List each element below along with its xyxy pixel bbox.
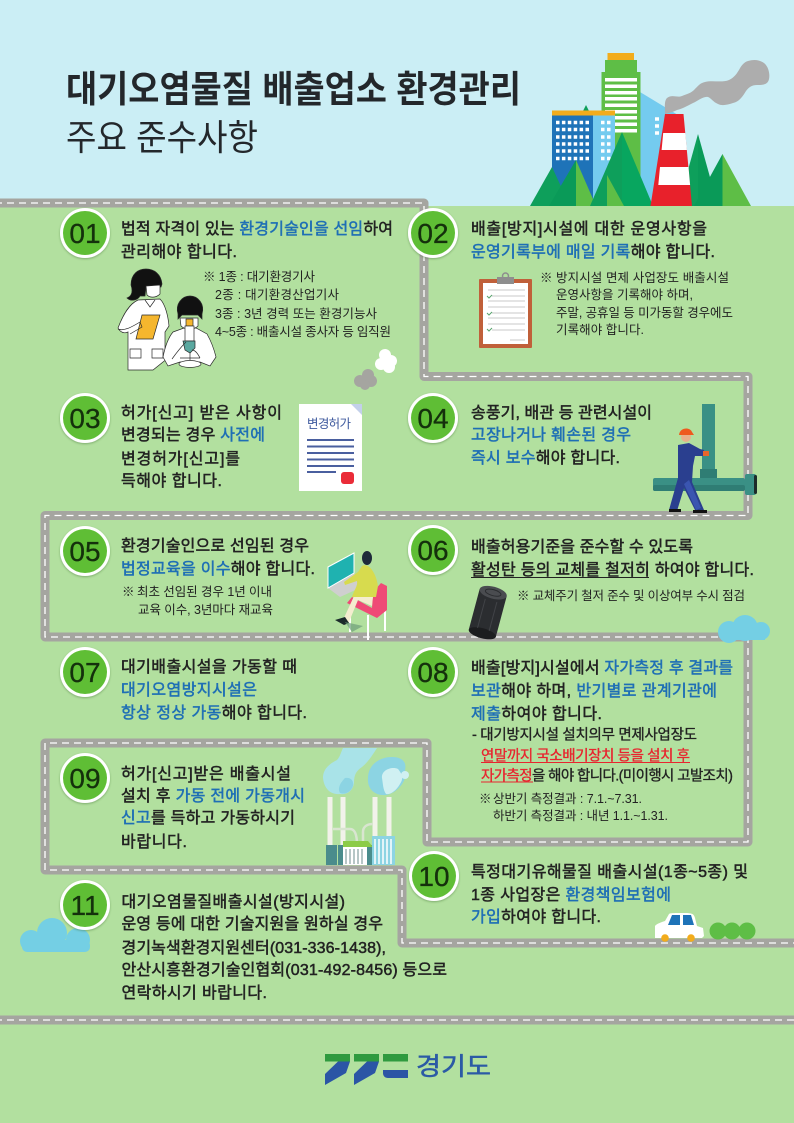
text 03: 변경허가[신고]를 bbox=[121, 450, 240, 468]
note 01: 3종 : 3년 경력 또는 환경기능사 bbox=[215, 307, 377, 321]
number badge 05 bbox=[60, 526, 110, 576]
title bbox=[66, 69, 521, 158]
text 02: 배출[방지]시설에 대한 운영사항을 bbox=[471, 220, 707, 238]
note 08: ※ bbox=[479, 792, 492, 806]
number badge 09 bbox=[60, 753, 110, 803]
decoration: cloud left bbox=[20, 918, 90, 952]
text 09: 허가[신고]받은 배출시설 bbox=[121, 765, 291, 783]
text 11: 경기녹색환경지원센터(031-336-1438), bbox=[122, 939, 386, 957]
number badge 11: 11 bbox=[70, 890, 100, 921]
number badge 01 bbox=[60, 208, 110, 258]
panel 10 bbox=[409, 851, 756, 942]
logo mark bbox=[325, 1054, 408, 1085]
logo wordmark: 경기도 bbox=[416, 1053, 491, 1081]
text 11 bbox=[122, 893, 447, 1002]
icon: clipboard bbox=[479, 273, 532, 348]
panel 03 bbox=[60, 393, 362, 491]
text 04: 고장나거나 훼손된 경우 bbox=[471, 426, 631, 444]
text 02: 운영기록부에 매일 기록해야 합니다. bbox=[471, 243, 715, 261]
text 09: 설치 후 가동 전에 가동개시 bbox=[121, 787, 305, 805]
road bbox=[0, 203, 794, 1020]
text 03: 변경되는 경우 사전에 bbox=[121, 426, 265, 444]
text 05: 환경기술인으로 선임된 경우 bbox=[121, 537, 309, 555]
title line 2: 주요 준수사항 bbox=[66, 117, 258, 158]
text 03 bbox=[121, 404, 282, 490]
number badge 02: 02 bbox=[417, 218, 449, 249]
warning text 08: - 대기방지시설 설치의무 면제사업장도 bbox=[472, 726, 697, 744]
logo: Gyeonggi-do bbox=[325, 1053, 491, 1085]
panel 05 bbox=[60, 526, 387, 640]
note 01: 2종 : 대기환경산업기사 bbox=[215, 288, 339, 302]
text 10: 특정대기유해물질 배출시설(1종~5종) 및 bbox=[471, 863, 748, 881]
text 08: 제출하여야 합니다. bbox=[471, 705, 602, 723]
number badge 11 bbox=[60, 880, 110, 930]
text 06: 활성탄 등의 교체를 철저히 하여야 합니다. bbox=[471, 561, 754, 579]
number badge 03 bbox=[60, 393, 110, 443]
icon: white car bbox=[655, 913, 704, 942]
panel 04 bbox=[408, 393, 757, 513]
number badge 04 bbox=[408, 393, 458, 443]
decoration: puff clouds bbox=[354, 349, 397, 390]
text 05 bbox=[121, 537, 315, 578]
warning text 08: 연말까지 국소배기장치 등을 설치 후 bbox=[481, 748, 690, 764]
icon: activated carbon cylinder bbox=[467, 583, 508, 642]
text 10: 1종 사업장은 환경책임보험에 bbox=[471, 886, 671, 904]
text 07 bbox=[121, 658, 307, 722]
note 02 bbox=[540, 271, 733, 337]
note 05: 교육 이수, 3년마다 재교육 bbox=[138, 603, 273, 617]
number badge 06 bbox=[408, 525, 458, 575]
number badge 06: 06 bbox=[417, 535, 449, 566]
panel 02 bbox=[408, 208, 733, 348]
note 01 bbox=[203, 270, 391, 339]
icon: permit document: 변경허가 bbox=[307, 417, 351, 431]
note 05: ※ bbox=[122, 585, 135, 599]
warning text 08 bbox=[472, 726, 733, 784]
note 02: 주말, 공휴일 등 미가동할 경우에도 bbox=[556, 306, 733, 320]
number badge 04: 04 bbox=[417, 403, 449, 434]
background: sky bbox=[0, 0, 794, 206]
text 09: 신고를 득하고 가동하시기 bbox=[121, 809, 295, 827]
icon: person at computer bbox=[328, 551, 387, 640]
number badge 09: 09 bbox=[69, 763, 101, 794]
text 01: 관리해야 합니다. bbox=[121, 243, 237, 261]
text 01 bbox=[121, 220, 393, 261]
note 02: ※ bbox=[540, 271, 553, 285]
note 02: 방지시설 면제 사업장도 배출시설 bbox=[556, 271, 729, 285]
text 03: 허가[신고] 받은 사항이 bbox=[121, 404, 282, 422]
warning text 08: 자가측정을 해야 합니다.(미이행시 고발조치) bbox=[481, 768, 733, 784]
text 07: 대기배출시설을 가동할 때 bbox=[121, 658, 297, 676]
text 06: 배출허용기준을 준수할 수 있도록 bbox=[471, 538, 693, 556]
text 08: 보관해야 하며, 반기별로 관계기관에 bbox=[471, 682, 717, 700]
text 11: 운영 등에 대한 기술지원을 원하실 경우 bbox=[122, 915, 383, 933]
text 07: 항상 정상 가동해야 합니다. bbox=[121, 704, 307, 722]
text 01: 법적 자격이 있는 환경기술인을 선임하여 bbox=[121, 220, 393, 238]
panel 06 bbox=[408, 525, 754, 642]
text 10 bbox=[471, 863, 748, 926]
text 11: 안산시흥환경기술인협회(031-492-8456) 등으로 bbox=[122, 961, 447, 979]
text 08: 배출[방지]시설에서 자가측정 후 결과를 bbox=[471, 659, 733, 677]
text 10: 가입하여야 합니다. bbox=[471, 908, 601, 926]
text 09: 바랍니다. bbox=[121, 833, 187, 851]
note 08: 하반기 측정결과 : 내년 1.1.~1.31. bbox=[493, 809, 668, 823]
illustration: city skyline and chimney bbox=[530, 53, 769, 206]
text 03: 득해야 합니다. bbox=[121, 472, 222, 490]
title line 1: 대기오염물질 배출업소 환경관리 bbox=[66, 69, 521, 110]
number badge 07: 07 bbox=[69, 657, 101, 688]
note 02: 운영사항을 기록해야 하며, bbox=[556, 288, 693, 302]
note 05 bbox=[122, 585, 273, 617]
text 07: 대기오염방지시설은 bbox=[121, 681, 257, 699]
note 05: 최초 선임된 경우 1년 이내 bbox=[137, 585, 272, 599]
text 11: 대기오염물질배출시설(방지시설) bbox=[122, 893, 345, 911]
text 06 bbox=[471, 538, 754, 579]
note 02: 기록해야 합니다. bbox=[556, 323, 644, 337]
number badge 07 bbox=[60, 647, 110, 697]
number badge 10 bbox=[409, 851, 459, 901]
number badge 03: 03 bbox=[69, 403, 101, 434]
note 01: ※ 1종 : 대기환경기사 bbox=[203, 270, 315, 284]
icon: scientists bbox=[118, 269, 216, 370]
icon: worker fixing pipe bbox=[653, 404, 757, 513]
number badge 05: 05 bbox=[69, 536, 101, 567]
note 06: ※ 교체주기 철저 준수 및 이상여부 수시 점검 bbox=[517, 589, 745, 603]
icon: permit document bbox=[299, 404, 362, 491]
number badge 08 bbox=[408, 647, 458, 697]
icon: green bushes bbox=[710, 922, 756, 940]
text 05: 법정교육을 이수해야 합니다. bbox=[121, 560, 315, 578]
note 08: 상반기 측정결과 : 7.1.~7.31. bbox=[493, 792, 642, 806]
number badge 02 bbox=[408, 208, 458, 258]
text 04 bbox=[471, 404, 652, 467]
text 09 bbox=[121, 765, 305, 851]
icon: factory with smokestacks bbox=[323, 748, 409, 865]
panel 11 bbox=[60, 880, 447, 1002]
number badge 01: 01 bbox=[69, 218, 101, 249]
panel 09 bbox=[60, 748, 409, 865]
decoration: cloud right bbox=[718, 615, 770, 643]
panel 07 bbox=[60, 647, 307, 722]
text 02 bbox=[471, 220, 715, 261]
text 11: 연락하시기 바랍니다. bbox=[122, 984, 267, 1002]
panel 01 bbox=[60, 208, 393, 370]
panel 08 bbox=[408, 647, 733, 823]
text 08 bbox=[471, 659, 733, 723]
text 04: 송풍기, 배관 등 관련시설이 bbox=[471, 404, 652, 422]
number badge 08: 08 bbox=[417, 657, 449, 688]
note 08 bbox=[479, 792, 668, 823]
text 04: 즉시 보수해야 합니다. bbox=[471, 449, 620, 467]
number badge 10: 10 bbox=[418, 861, 450, 892]
note 01: 4~5종 : 배출시설 종사자 등 임직원 bbox=[215, 325, 391, 339]
